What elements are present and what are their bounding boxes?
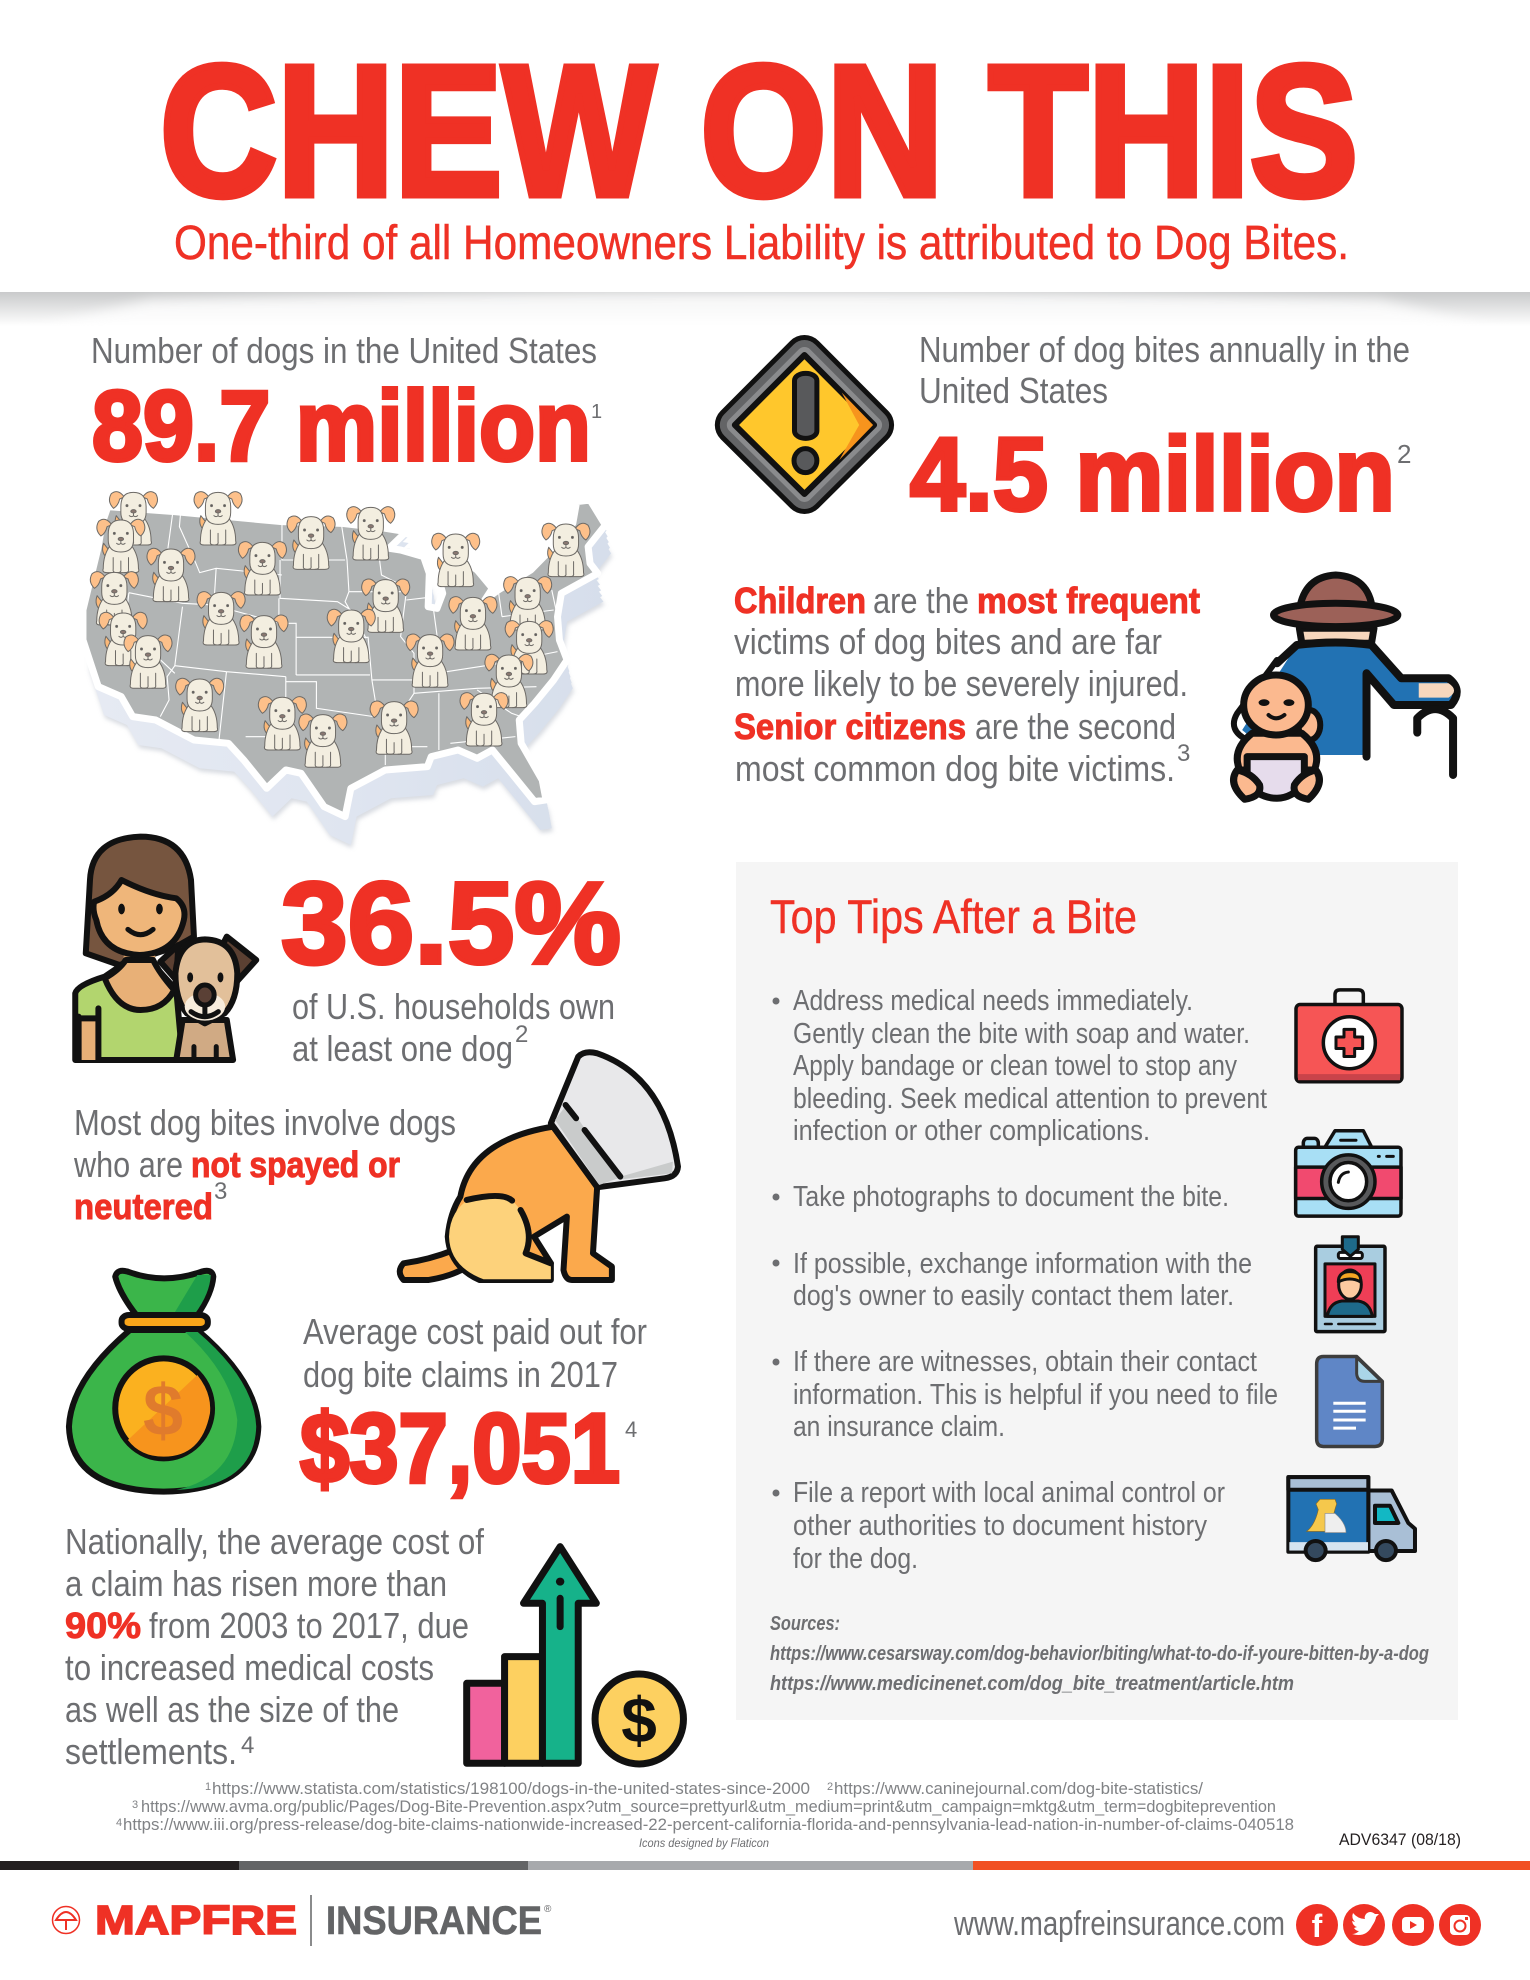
title: CHEW ON THIS xyxy=(160,28,1358,235)
icon: instagram xyxy=(1439,1904,1481,1946)
icon credit: Icons designed by Flaticon xyxy=(639,1836,769,1850)
icon: first aid kit xyxy=(1296,990,1402,1082)
tip 1: bleeding. Seek medical attention to prevent xyxy=(793,1083,1267,1115)
icon: camera xyxy=(1296,1131,1401,1216)
map shadow xyxy=(90,532,612,848)
map top surface xyxy=(83,500,605,817)
footnote marker 1: 1 xyxy=(591,401,602,423)
tip 5: File a report with local animal control or xyxy=(793,1477,1225,1509)
line 2: who are xyxy=(73,1144,183,1185)
line 1 end: most frequent xyxy=(977,580,1200,621)
sources xyxy=(770,1613,1429,1695)
footnote marker 2: 2 xyxy=(515,1021,528,1048)
tip 4: information. This is helpful if you need to file xyxy=(793,1379,1278,1411)
footnote marker 3: 3 xyxy=(1177,740,1190,767)
line 3 highlight: 90% xyxy=(65,1605,141,1646)
icon: facebook xyxy=(1296,1904,1338,1946)
text: not spayed or neutered xyxy=(73,1102,456,1227)
icon: id badge xyxy=(1316,1237,1385,1332)
logo insurance: INSURANCE xyxy=(326,1899,542,1943)
tip 1: Apply bandage or clean towel to stop any xyxy=(793,1050,1237,1082)
footnotes: 2 xyxy=(827,1781,833,1793)
icon: animal control truck xyxy=(1288,1477,1415,1560)
website: www.mapfreinsurance.com xyxy=(953,1905,1285,1943)
line 1: Children xyxy=(734,580,866,621)
line 2 highlight: not spayed or xyxy=(191,1144,400,1185)
icon: facebook: f xyxy=(1312,1908,1323,1944)
icon: money bag xyxy=(69,1271,258,1492)
tip 1: infection or other complications. xyxy=(793,1115,1150,1147)
icon: chart coin dollar sign: $ xyxy=(621,1684,657,1756)
label line 2: dog bite claims in 2017 xyxy=(303,1354,618,1395)
tip 5: for the dog. xyxy=(793,1543,918,1575)
icon: money bag dollar sign: $ xyxy=(143,1371,183,1451)
tip 4: an insurance claim. xyxy=(793,1411,1005,1443)
icon: senior with cane and baby xyxy=(1234,575,1457,799)
stat: number of dogs xyxy=(91,330,602,481)
tip 5: other authorities to document history xyxy=(793,1510,1207,1542)
line 1 middle: are the xyxy=(873,580,969,621)
line 3: more likely to be severely injured. xyxy=(735,663,1188,704)
line 5: as well as the size of the xyxy=(65,1689,399,1730)
dog icons scattered over the map xyxy=(90,492,590,767)
MAPFRE logo xyxy=(52,1895,552,1946)
footnotes xyxy=(116,1779,1294,1834)
stat: number of dog bites xyxy=(910,329,1411,533)
text: children and seniors xyxy=(734,580,1200,789)
footnote marker 2: 2 xyxy=(1397,439,1411,469)
footnote marker 3: 3 xyxy=(214,1178,227,1205)
footnotes: https://www.statista.com/statistics/198100/dogs-in-the-united-states-since-2000 xyxy=(212,1779,810,1798)
icon: dog with cone xyxy=(400,1052,678,1280)
icon: woman with dog xyxy=(75,837,256,1060)
document code: ADV6347 (08/18) xyxy=(1339,1830,1461,1849)
line 4: Senior citizens xyxy=(734,706,966,747)
tip 4 xyxy=(772,1346,1278,1443)
line 1: Most dog bites involve dogs xyxy=(74,1102,456,1143)
US map with dogs xyxy=(83,492,612,848)
logo wordmark: MAPFRE xyxy=(95,1897,297,1943)
line 1: Nationally, the average cost of xyxy=(65,1521,485,1562)
panel heading: Top Tips After a Bite xyxy=(770,890,1137,943)
line 4 end: are the second xyxy=(975,706,1176,747)
description line 1: of U.S. households own xyxy=(292,986,615,1027)
tip 1: Gently clean the bite with soap and water. xyxy=(793,1018,1250,1050)
logo emblem xyxy=(52,1906,80,1934)
tip 3: If possible, exchange information with the xyxy=(793,1248,1252,1280)
registered mark: ® xyxy=(544,1904,552,1915)
tip 3: dog's owner to easily contact them later. xyxy=(793,1280,1234,1312)
footnotes: 4 xyxy=(116,1817,122,1829)
header shadow band xyxy=(0,292,1530,330)
footnote marker 4: 4 xyxy=(625,1417,637,1442)
stat: households xyxy=(281,858,621,1069)
line 5: most common dog bite victims. xyxy=(735,748,1175,789)
map extrusion xyxy=(84,506,611,845)
social icons xyxy=(1296,1904,1481,1946)
tip 4: If there are witnesses, obtain their contact xyxy=(793,1346,1257,1378)
icon: warning sign xyxy=(735,355,874,494)
tip 2: Take photographs to document the bite. xyxy=(793,1181,1229,1213)
text: claim cost rise xyxy=(65,1521,485,1772)
label line 1: Average cost paid out for xyxy=(303,1311,647,1352)
footnotes: 1 xyxy=(205,1781,211,1793)
panel: top tips xyxy=(736,862,1458,1720)
icon: twitter xyxy=(1343,1904,1385,1946)
footnotes: https://www.avma.org/public/Pages/Dog-Bite-Prevention.aspx?utm_source=prettyurl&utm_medium=print&utm_campaign=mktg&utm_term=dogbiteprevention xyxy=(141,1797,1276,1816)
value: 36.5%: 36.5% xyxy=(281,858,621,988)
footnotes: 3 xyxy=(132,1799,138,1811)
footnotes: https://www.caninejournal.com/dog-bite-statistics/ xyxy=(834,1779,1203,1798)
stat: average cost xyxy=(300,1311,647,1503)
footnotes: https://www.iii.org/press-release/dog-bite-claims-nationwide-increased-22-percent-california-florida-and-pennsylvania-lead-nation-in-number-of-claims-040518 xyxy=(123,1815,1294,1834)
description line 2: at least one dog xyxy=(292,1028,513,1069)
footer color bar xyxy=(0,1861,1530,1870)
value: 89.7 million: 89.7 million xyxy=(92,370,591,481)
value: 4.5 million: 4.5 million xyxy=(910,417,1395,533)
value: $37,051: $37,051 xyxy=(300,1393,620,1503)
tip 3 xyxy=(772,1248,1252,1312)
label line 2: United States xyxy=(919,370,1108,411)
icon: document xyxy=(1317,1357,1382,1446)
subtitle: One-third of all Homeowners Liability is attributed to Dog Bites. xyxy=(174,217,1349,270)
tip 1: Address medical needs immediately. xyxy=(793,985,1193,1017)
line 2: victims of dog bites and are far xyxy=(734,621,1162,662)
line 4: to increased medical costs xyxy=(65,1647,434,1688)
tip 1 xyxy=(772,985,1267,1147)
line 2: a claim has risen more than xyxy=(65,1563,447,1604)
footnote marker 4: 4 xyxy=(241,1732,254,1759)
icon: youtube xyxy=(1392,1904,1434,1946)
label: number of dog bites: Number of dog bites annually in the xyxy=(919,329,1410,370)
line 3: from 2003 to 2017, due xyxy=(149,1605,469,1646)
sources: Sources: xyxy=(770,1613,840,1635)
sources: https://www.medicinenet.com/dog_bite_treatment/article.htm xyxy=(770,1673,1294,1695)
tip 5 xyxy=(772,1477,1225,1575)
icon: rising chart with coin xyxy=(467,1547,683,1764)
line 6: settlements. xyxy=(65,1731,237,1772)
label: number of dogs: Number of dogs in the United States xyxy=(91,330,597,371)
icons: tip illustrations xyxy=(1288,990,1415,1560)
line 3 highlight: neutered xyxy=(74,1186,213,1227)
state lines xyxy=(125,512,558,765)
